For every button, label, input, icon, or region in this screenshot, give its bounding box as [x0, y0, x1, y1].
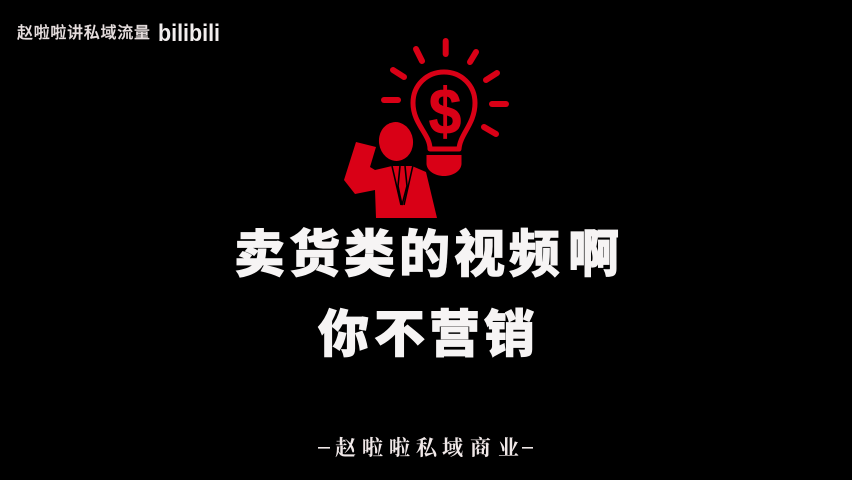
- icon: businessman head: [376, 120, 416, 163]
- icon: businessman body: [344, 142, 437, 218]
- icon: tie and collar lines: [392, 165, 413, 205]
- icon: light rays: [384, 41, 506, 134]
- headline line 2: 你不营销: [318, 306, 535, 363]
- headline line 1: 卖货类的视频啊: [234, 226, 619, 283]
- icon: dollar sign: $: [429, 76, 461, 148]
- left dash: [318, 447, 330, 449]
- bilibili logo: bilibili: [158, 20, 220, 47]
- signature text: 赵啦啦私域商业: [335, 436, 519, 460]
- channel name: 赵啦啦讲私域流量: [17, 23, 151, 42]
- channel watermark: [17, 20, 220, 47]
- icon: light bulb outline: [413, 72, 475, 149]
- icon: bulb base: [426, 155, 462, 176]
- icon: businessman with dollar light bulb: [344, 41, 506, 218]
- right dash: [522, 447, 533, 449]
- headline: [234, 226, 619, 363]
